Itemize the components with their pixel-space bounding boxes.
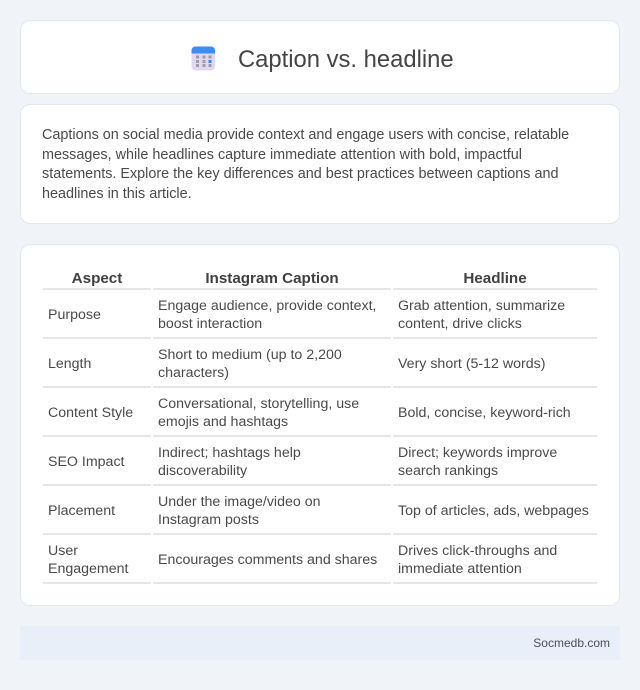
row: User Engagement: Encourages comments and shares: [158, 552, 377, 568]
title: Caption vs. headline: [238, 46, 454, 73]
row: Content Style: Content Style: [48, 405, 133, 421]
row: SEO Impact: Indirect; hashtags help: [158, 445, 301, 461]
panel: introduction: [20, 104, 620, 224]
text block: introduction: headlines in this article.: [42, 186, 192, 202]
row: Content Style: Conversational, storytelling, use: [158, 396, 359, 412]
text block: introduction: Captions on social media provide context and engage users with concise, relatable: [42, 127, 569, 143]
row: Content Style: emojis and hashtags: [158, 414, 288, 430]
row: Purpose: Grab attention, summarize: [398, 298, 565, 314]
row: Purpose: Engage audience, provide context,: [158, 298, 376, 314]
row: User Engagement: Drives click-throughs and: [398, 543, 557, 559]
footer bar: [20, 626, 620, 660]
row: Placement: [48, 494, 589, 528]
row: User Engagement: Engagement: [48, 561, 128, 577]
row: SEO Impact: [48, 445, 557, 479]
row: Purpose: boost interaction: [158, 316, 262, 332]
row: Length: Very short (5-12 words): [398, 356, 545, 372]
row: SEO Impact: discoverability: [158, 463, 247, 479]
header: Headline: Headline: [463, 270, 527, 287]
text block: introduction: [42, 127, 569, 202]
text block: introduction: messages, while headlines capture immediate attention with bold, impactful: [42, 146, 522, 162]
row: Purpose: [48, 298, 565, 332]
row: User Engagement: User: [48, 543, 78, 559]
panel: comparison table: [20, 244, 620, 606]
row: Purpose: Purpose: [48, 307, 101, 323]
row: Length: [48, 347, 545, 381]
row: Content Style: Bold, concise, keyword-rich: [398, 405, 571, 421]
row: User Engagement: [48, 543, 557, 577]
row: Length: Short to medium (up to 2,200: [158, 347, 342, 363]
row: Content Style: [48, 396, 571, 430]
text block: introduction: statements. Explore the key differences and best practices between captions and: [42, 166, 559, 182]
row: Length: characters): [158, 365, 229, 381]
panel: title card: [20, 20, 620, 94]
row: Placement: Instagram posts: [158, 512, 259, 528]
row: SEO Impact: search rankings: [398, 463, 498, 479]
row: SEO Impact: Direct; keywords improve: [398, 445, 557, 461]
header: Instagram Caption: Instagram Caption: [205, 270, 339, 287]
row: User Engagement: immediate attention: [398, 561, 522, 577]
footer text: Socmedb.com: [533, 636, 610, 650]
row: Length: Length: [48, 356, 91, 372]
row: SEO Impact: SEO Impact: [48, 454, 124, 470]
row: Placement: Top of articles, ads, webpages: [398, 503, 589, 519]
row: Placement: Placement: [48, 503, 115, 519]
icon: calendar: [192, 46, 215, 70]
row: Placement: Under the image/video on: [158, 494, 320, 510]
header: Aspect: Aspect: [72, 270, 122, 287]
row: Purpose: content, drive clicks: [398, 316, 522, 332]
